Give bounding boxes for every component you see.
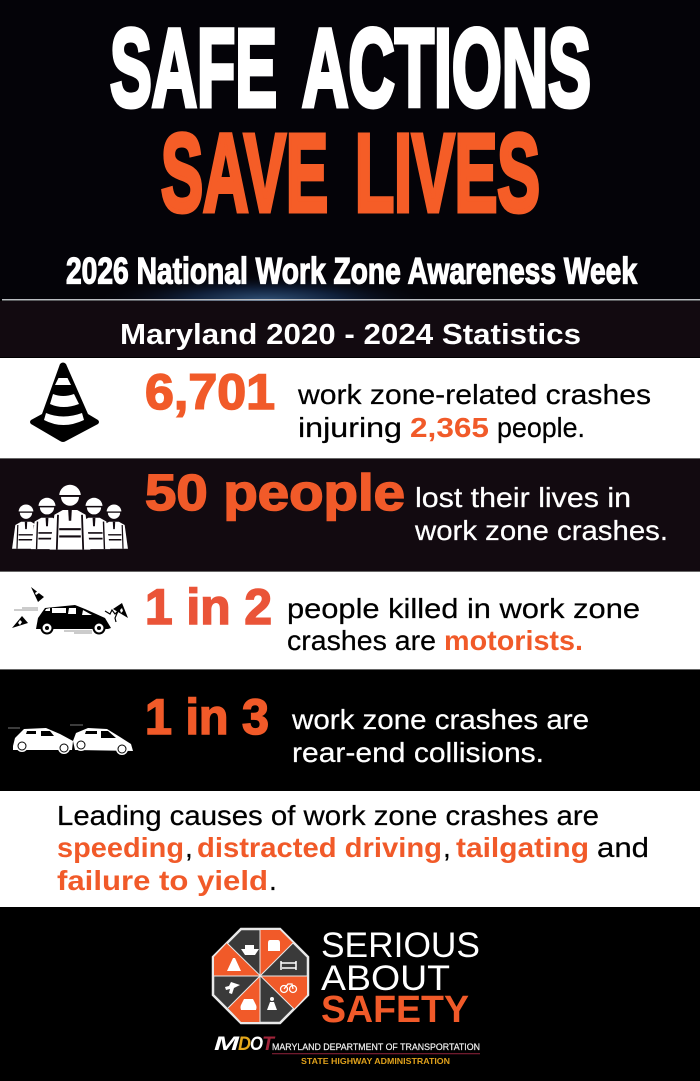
title: LIVES [355,112,540,235]
stat text: motorists. [444,625,583,656]
stat text: people killed in work zone [287,593,640,624]
stat text [297,379,651,443]
panel: leading causes: speeding [57,832,184,863]
statistics heading band: Maryland 2020 - 2024 Statistics [120,319,581,351]
agency name [272,1042,480,1066]
panel: leading causes: failure to yield [57,865,268,896]
panel: leading causes: and [597,832,649,863]
panel: leading causes: distracted driving [197,832,442,863]
MDOT logo: D [238,1034,251,1055]
stat text: work zone-related crashes [297,379,651,410]
stat text [291,704,589,768]
stat text: 2,365 [410,412,489,443]
stat number: 6,701 [145,364,275,420]
stat text: lost their lives in [415,482,631,513]
stat text: work zone crashes. [414,515,668,546]
stat number: 1 in 2 [145,579,272,635]
stat text [287,593,640,656]
stat text: people. [497,412,585,443]
MDOT logo: T [262,1034,275,1055]
title: SAVE [161,112,328,235]
stat text [414,482,668,546]
icon: construction workers [12,485,128,550]
serious about safety wordmark: SERIOUS [321,926,480,965]
serious about safety wordmark [321,926,480,1031]
panel: leading causes: . [269,865,277,896]
panel: 1 in 2 [0,571,700,669]
panel: leading causes: tailgating [456,832,589,863]
panel: leading causes [0,791,700,907]
stat text: rear-end collisions. [292,737,544,768]
panel: leading causes: , [185,832,193,863]
panel: leading causes: Leading causes of work zone crashes are [57,800,599,831]
statistics heading band [0,301,700,357]
icon: traffic cone [30,362,99,442]
stat text: injuring [298,412,402,443]
title: SAFE [110,7,277,130]
panel: leading causes: , [443,832,451,863]
serious about safety wordmark: ABOUT [321,959,450,998]
title [110,7,591,235]
panel: 50 people [0,458,700,571]
small icons in logo [225,940,296,1010]
panel: 6,701 crashes [0,358,700,458]
serious about safety wordmark: SAFETY [321,989,469,1031]
stat number: 50 people [145,464,405,521]
icon: car hitting cones [12,587,128,634]
agency name: STATE HIGHWAY ADMINISTRATION [301,1056,450,1066]
icon: rear-end collision [8,725,133,755]
stat text: crashes are [287,625,436,656]
panel: footer [0,908,700,1081]
panel: 1 in 3 [0,669,700,790]
MDOT logo: O [250,1034,263,1055]
MDOT logo: M [214,1034,241,1055]
agency name: MARYLAND DEPARTMENT OF TRANSPORTATION [272,1042,480,1052]
stat text: work zone crashes are [291,704,589,735]
stat number: 1 in 3 [145,689,269,745]
icon: safety octagon logo [213,929,308,1023]
background header [0,0,700,326]
MDOT logo [214,1034,275,1055]
